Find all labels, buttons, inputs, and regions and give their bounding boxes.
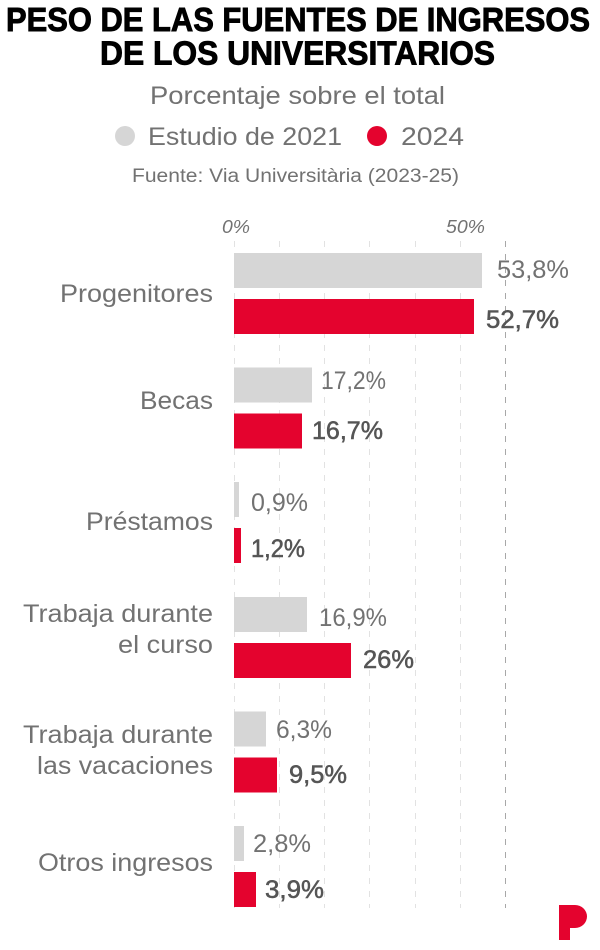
group: Préstamos: Préstamos (86, 508, 213, 536)
axis labels: 0% (222, 217, 250, 237)
legend: Estudio de 2021 (148, 123, 342, 151)
group: Trabaja durante el curso: 26% (363, 646, 414, 674)
legend (115, 123, 464, 151)
group: Trabaja durante las vacaciones (23, 712, 347, 792)
group: Trabaja durante el curso: Trabaja durante (23, 600, 213, 628)
axis labels: 50% (446, 217, 485, 237)
axis labels (222, 217, 485, 237)
group: Progenitores: 53,8% (497, 256, 569, 284)
group: Becas (140, 367, 386, 448)
group: Otros ingresos: 2,8% (253, 830, 311, 858)
group: Trabaja durante las vacaciones: 6,3% (276, 716, 332, 744)
group: Otros ingresos: Otros ingresos (38, 849, 213, 877)
group: Préstamos: 1,2% (251, 535, 305, 563)
icon: publisher logo (559, 905, 587, 940)
title (6, 1, 590, 72)
group: Trabaja durante las vacaciones: 9,5% (289, 761, 347, 789)
group: Otros ingresos: 3,9% (265, 876, 324, 904)
source: Fuente: Via Universitària (2023-25) (132, 166, 459, 187)
group: Progenitores (60, 253, 569, 334)
legend: 2024 (401, 123, 464, 151)
group: Trabaja durante el curso: 16,9% (319, 604, 387, 632)
group: Progenitores: Progenitores (60, 280, 213, 308)
group: Becas: 16,7% (312, 417, 383, 445)
group: Trabaja durante el curso: el curso (118, 631, 213, 659)
group: Trabaja durante las vacaciones: Trabaja durante (23, 721, 213, 749)
group: Becas: Becas (140, 387, 213, 415)
group: Otros ingresos (38, 826, 324, 907)
subtitle: Porcentaje sobre el total (150, 82, 445, 110)
group: Préstamos: 0,9% (251, 489, 308, 517)
group: Préstamos (86, 482, 308, 563)
group: Trabaja durante las vacaciones: las vacaciones (37, 752, 213, 780)
group: Becas: 17,2% (321, 367, 386, 395)
group: Progenitores: 52,7% (486, 306, 559, 334)
group: Trabaja durante el curso (23, 597, 414, 678)
title: DE LOS UNIVERSITARIOS (100, 34, 495, 72)
